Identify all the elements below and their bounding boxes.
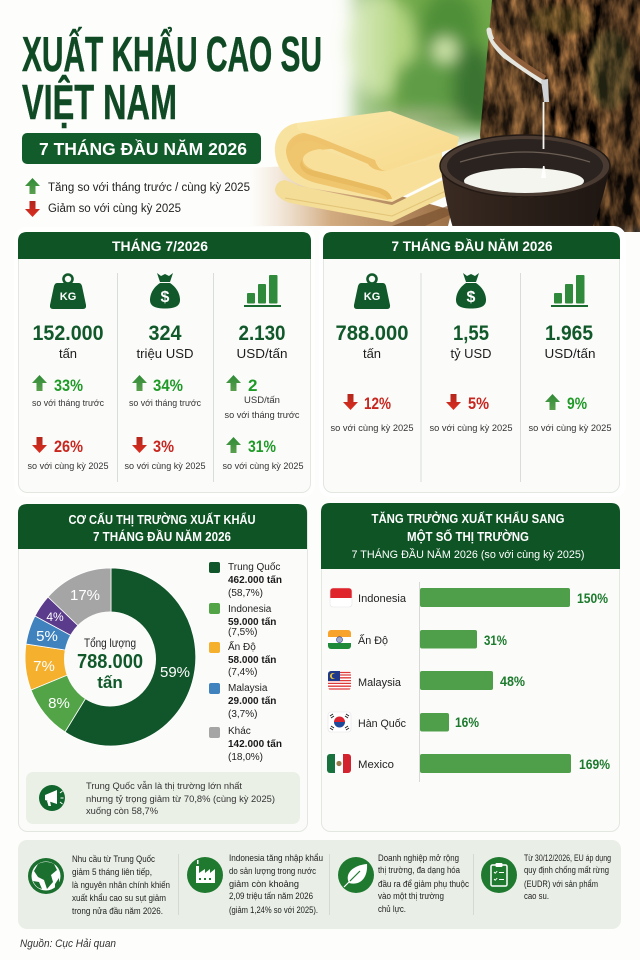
note: EUDR regulation: (EUDR) với sản phẩm — [524, 879, 598, 889]
note: China demand: trong nửa đầu năm 2026. — [72, 906, 163, 916]
bottom sheet — [275, 178, 449, 222]
title: XUẤT KHẨU CAO SU — [22, 27, 322, 82]
note: market diversification: đầu ra để giảm phụ thuộc — [378, 879, 469, 889]
donut chart — [25, 568, 196, 746]
note: EUDR regulation — [481, 853, 611, 901]
column: price — [528, 275, 612, 434]
chart legend: 142.000 tấn — [228, 738, 282, 750]
note: EUDR regulation: cao su. — [524, 891, 549, 901]
panel: export growth by market — [321, 503, 620, 832]
chart legend: Indonesia — [228, 604, 272, 615]
chart legend: 29.000 tấn — [228, 695, 276, 707]
column: volume: so với tháng trước — [32, 398, 104, 409]
chart legend: 462.000 tấn — [228, 574, 282, 586]
chart legend: 59.000 tấn — [228, 616, 276, 628]
bar: India — [328, 630, 507, 649]
callout: xuống còn 58,7% — [86, 806, 159, 817]
panel header: 7 THÁNG ĐẦU NĂM 2026 — [392, 239, 553, 254]
outer fold — [275, 123, 442, 202]
column: volume: 788.000 — [336, 322, 408, 345]
note: Indonesia imports: giảm còn khoảng — [229, 879, 299, 889]
column: value: so với tháng trước — [129, 398, 201, 409]
column: value — [430, 273, 512, 434]
panel header: THÁNG 7/2026 — [112, 239, 208, 254]
column: value: $ — [161, 289, 170, 306]
panel: notes band — [18, 840, 621, 929]
panel: first 7 months of 2026 — [319, 226, 626, 497]
column: price: USD/tấn — [244, 395, 280, 406]
callout: Trung Quốc vẫn là thị trường lớn nhất — [86, 781, 242, 792]
bar: South Korea — [328, 712, 479, 732]
icon: clipboard — [481, 857, 517, 893]
column: price: USD/tấn — [236, 346, 288, 361]
donut chart: 4% — [46, 610, 64, 624]
chart legend — [209, 561, 282, 763]
panel header: MỘT SỐ THỊ TRƯỜNG — [407, 529, 529, 544]
panel header — [18, 232, 311, 259]
chart legend: (58,7%) — [228, 588, 263, 599]
period badge: 7 THÁNG ĐẦU NĂM 2026 — [39, 138, 247, 159]
bar: Malaysia: 48% — [500, 673, 525, 689]
note: China demand: giảm 5 tháng liên tiếp, — [72, 867, 152, 877]
column: volume: 12% — [364, 394, 391, 413]
note: China demand: là nguyên nhân chính khiến — [72, 880, 170, 890]
column: price: so với tháng trước — [224, 410, 300, 421]
column: price: 2 — [248, 376, 257, 395]
note: market diversification: thị trường, đa dạng hóa — [378, 865, 460, 875]
column: price — [222, 275, 304, 472]
wooden board — [250, 166, 452, 226]
panel header — [321, 503, 620, 569]
note: China demand — [28, 854, 170, 916]
chart legend: (3,7%) — [228, 709, 257, 720]
icon: factory — [187, 857, 223, 893]
column: price: USD/tấn — [544, 346, 596, 361]
column: value: 34% — [153, 376, 183, 395]
note: market diversification: vào một thị trường — [378, 891, 444, 901]
panel: July 2026 — [14, 227, 315, 497]
period badge — [22, 133, 261, 164]
chart legend: (18,0%) — [228, 752, 263, 763]
column: value: 324 — [148, 322, 182, 345]
bar: India: 31% — [484, 632, 507, 648]
bar: Indonesia: Indonesia — [358, 593, 407, 605]
bar: Indonesia: 150% — [577, 590, 608, 606]
donut chart: 7% — [33, 658, 55, 675]
title: VIỆT NAM — [22, 75, 177, 130]
chart legend: Trung Quốc — [228, 561, 280, 573]
column: value: 5% — [468, 394, 489, 413]
donut chart: 59% — [160, 664, 190, 681]
note: EUDR regulation: Từ 30/12/2026, EU áp dụng — [524, 853, 611, 863]
panel header: TĂNG TRƯỞNG XUẤT KHẨU SANG — [372, 511, 564, 526]
column: value: 3% — [153, 437, 174, 456]
donut chart: 17% — [70, 587, 100, 604]
note: China demand: Nhu cầu từ Trung Quốc — [72, 854, 155, 864]
note: Indonesia imports: Indonesia tăng nhập khẩu — [229, 853, 323, 863]
note: China demand: xuất khẩu cao su sụt giảm — [72, 893, 166, 903]
legend: increase and decrease: Tăng so với tháng trước / cùng kỳ 2025 — [48, 182, 250, 194]
column: price: so với cùng kỳ 2025 — [222, 461, 304, 472]
panel: export market structure — [18, 504, 308, 832]
chart legend: Khác — [228, 726, 251, 737]
bar: South Korea: Hàn Quốc — [358, 718, 406, 730]
middle sheet — [303, 149, 442, 199]
icon: leaf — [338, 857, 374, 893]
column: volume: KG — [364, 291, 380, 303]
icon: globe — [28, 858, 64, 894]
column: volume: KG — [60, 291, 76, 303]
donut chart: 5% — [36, 628, 58, 645]
note: Indonesia imports: 2,09 triệu tấn năm 2026 — [229, 891, 313, 901]
note: Indonesia imports — [187, 853, 323, 915]
chart legend: Malaysia — [228, 683, 268, 694]
column: price: 2.130 — [238, 322, 286, 345]
note: market diversification: chủ lực. — [378, 904, 406, 914]
chart legend: (7,5%) — [228, 627, 257, 638]
column: value: so với cùng kỳ 2025 — [430, 423, 512, 434]
legend: increase and decrease: Giảm so với cùng kỳ 2025 — [48, 203, 181, 215]
donut center total — [77, 636, 143, 692]
bar: Malaysia: Malaysia — [358, 677, 402, 689]
chart legend: 58.000 tấn — [228, 654, 276, 666]
hero bottom fade — [0, 224, 640, 286]
donut center total: 788.000 — [77, 651, 143, 673]
column: price: 1.965 — [545, 322, 593, 345]
legend: increase and decrease — [25, 178, 250, 217]
column: volume: so với cùng kỳ 2025 — [330, 423, 414, 434]
column: value: tỷ USD — [450, 346, 492, 361]
top sheet — [297, 111, 459, 171]
donut center total: tấn — [97, 673, 123, 692]
column: price: so với cùng kỳ 2025 — [528, 423, 612, 434]
fold cavity — [286, 133, 392, 200]
column: volume: 152.000 — [32, 322, 104, 345]
column: value — [124, 273, 206, 472]
panel header: 7 THÁNG ĐẦU NĂM 2026 (so với cùng kỳ 2025) — [352, 548, 584, 561]
panel header — [18, 504, 307, 549]
column: volume: tấn — [59, 346, 77, 361]
column: value: so với cùng kỳ 2025 — [124, 461, 206, 472]
column: volume: 26% — [54, 437, 83, 456]
column: volume: tấn — [363, 346, 381, 361]
donut chart: 8% — [48, 695, 70, 712]
note: Indonesia imports: do sản lượng trong nước — [229, 866, 316, 876]
column: value: triệu USD — [136, 346, 194, 361]
bar: Mexico — [327, 754, 610, 773]
bar: South Korea: 16% — [455, 714, 479, 730]
bar: Mexico: 169% — [579, 756, 610, 772]
column: price: 9% — [567, 394, 587, 413]
callout: nhưng tỷ trọng giảm từ 70,8% (cùng kỳ 2025) — [86, 794, 275, 805]
column: volume: so với cùng kỳ 2025 — [28, 461, 108, 472]
column: volume — [28, 274, 108, 472]
column: volume — [330, 274, 414, 434]
note: Indonesia imports: (giảm 1,24% so với 2025). — [229, 905, 318, 915]
bar: Indonesia — [330, 588, 608, 607]
chart legend: (7,4%) — [228, 667, 257, 678]
panel header — [323, 232, 620, 259]
column: volume: 33% — [54, 376, 83, 395]
column: value: 1,55 — [453, 322, 489, 345]
chart legend: Ấn Độ — [228, 640, 256, 653]
bar: India: Ấn Độ — [358, 634, 388, 647]
title — [22, 27, 322, 130]
donut center total: Tổng lượng — [84, 636, 136, 650]
note: market diversification: Doanh nghiệp mở rộng — [378, 853, 459, 863]
panel header: 7 THÁNG ĐẦU NĂM 2026 — [93, 529, 231, 544]
bar: Mexico: Mexico — [358, 759, 394, 771]
icon: megaphone — [39, 785, 65, 811]
column: price: 31% — [248, 437, 276, 456]
callout — [26, 772, 300, 824]
source note: Nguồn: Cục Hải quan — [20, 938, 116, 950]
panel header: CƠ CẤU THỊ TRƯỜNG XUẤT KHẨU — [68, 512, 256, 527]
hero photo: rubber tree, latex sheets and bowl — [258, 0, 640, 232]
column: value: $ — [467, 289, 476, 306]
note: market diversification — [338, 853, 469, 914]
note: EUDR regulation: quy định chống mất rừng — [524, 865, 609, 875]
tap cut and drip — [489, 30, 543, 82]
bowl — [441, 170, 609, 228]
bar: Malaysia — [328, 671, 525, 690]
